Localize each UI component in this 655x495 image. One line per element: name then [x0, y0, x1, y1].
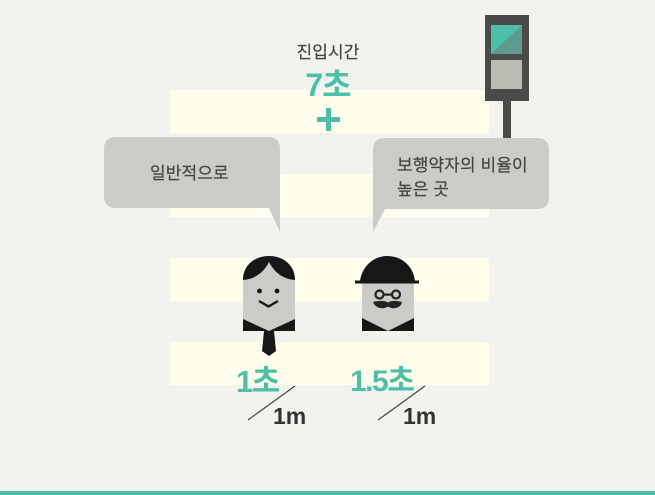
icon: woman with tie — [243, 256, 295, 356]
speech bubble: general — [104, 137, 280, 232]
crosswalk stripes — [170, 90, 489, 385]
bubble text: vulnerable pedestrians: 보행약자의 비율이 — [397, 156, 528, 175]
number: 1 second: 1초 — [236, 364, 279, 399]
bubble text: general: 일반적으로 — [150, 164, 229, 183]
slash: 1.5 seconds per metre — [378, 386, 425, 420]
number: 1.5 seconds: 1.5초 — [350, 365, 413, 398]
bubble text: vulnerable pedestrians — [397, 156, 528, 199]
icon: traffic signal — [485, 15, 529, 140]
icon: man with hat and glasses — [355, 256, 419, 331]
distance: 1 metre: 1m — [273, 403, 306, 429]
heading: entry time: 진입시간 — [297, 43, 359, 62]
distance: 1 metre: 1m — [403, 403, 436, 429]
bottom teal rule — [0, 491, 655, 495]
slash: 1 second per metre — [248, 386, 295, 420]
plus sign — [317, 108, 340, 131]
number: 7 seconds: 7초 — [305, 67, 351, 103]
speech bubble: high share of vulnerable pedestrians — [373, 138, 549, 232]
bubble text: vulnerable pedestrians: 높은 곳 — [397, 180, 449, 199]
